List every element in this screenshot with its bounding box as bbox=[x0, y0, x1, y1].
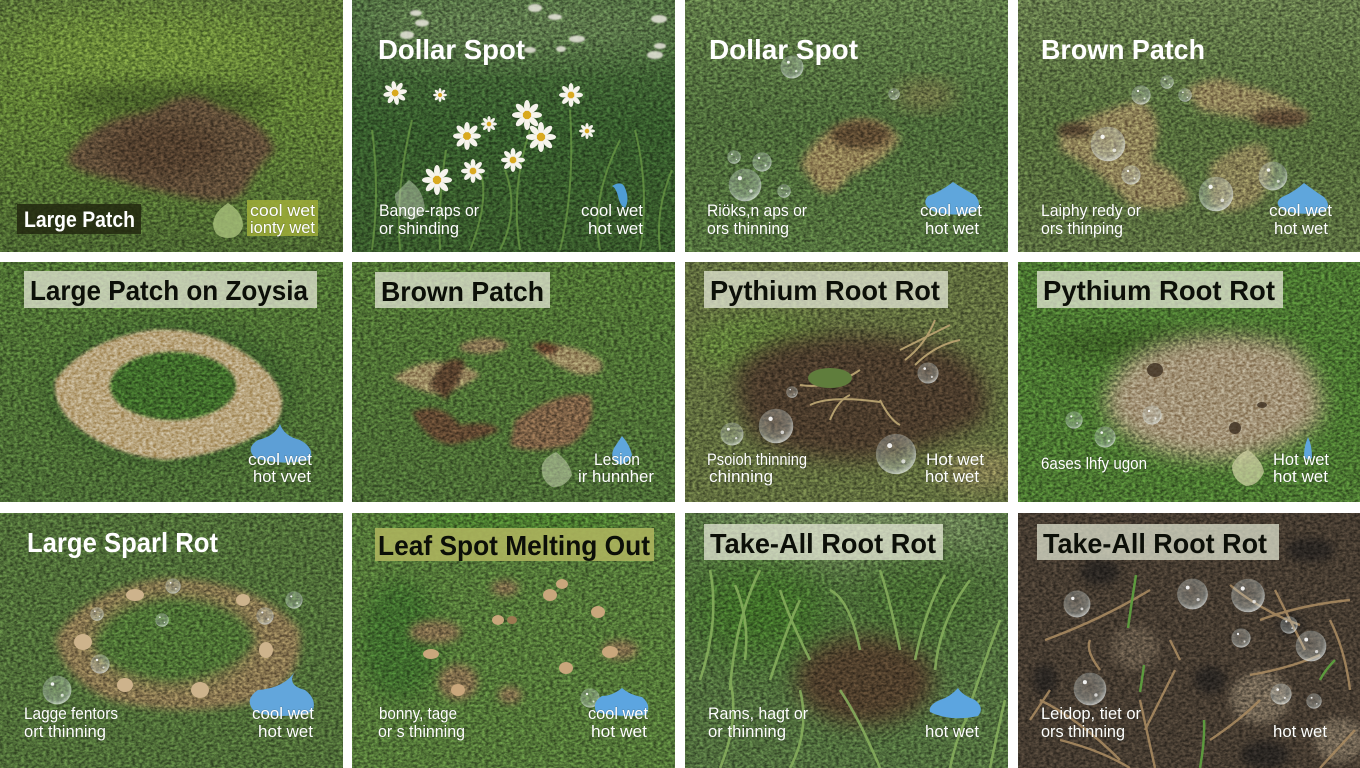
text block: conditions bbox=[920, 201, 982, 238]
panel: Take-All Root Rot grass bbox=[685, 500, 1010, 768]
text block: conditions: hot vvet bbox=[253, 467, 311, 486]
text block: conditions: hot wet bbox=[925, 219, 979, 238]
text block: symptom: ors thinning bbox=[707, 219, 789, 238]
text block: symptom: or s thinning bbox=[378, 722, 465, 741]
icon: water drop bbox=[1304, 437, 1312, 460]
icon: leaf bbox=[1232, 450, 1264, 486]
text block: conditions: cool wet bbox=[1269, 201, 1332, 220]
text block: symptom: ort thinning bbox=[24, 722, 106, 741]
text block: conditions bbox=[581, 201, 643, 238]
text block: symptom: chinning bbox=[709, 467, 773, 486]
icon: water drop bbox=[1278, 183, 1328, 214]
text block: conditions: cool wet bbox=[252, 704, 314, 723]
text block: conditions bbox=[588, 704, 648, 741]
text block: symptom bbox=[24, 704, 118, 741]
text block: symptom bbox=[1041, 704, 1141, 741]
panel: Dollar Spot patches bbox=[685, 0, 1008, 252]
text block: conditions bbox=[925, 450, 984, 486]
text block: conditions bbox=[248, 450, 312, 486]
panel: Brown Patch bubbles bbox=[1018, 0, 1360, 252]
icon: water drop bbox=[925, 182, 979, 214]
text block: conditions: hot wet bbox=[1274, 219, 1328, 238]
text block: symptom: Rams, hagt or bbox=[708, 704, 808, 723]
text block: symptom: or thinning bbox=[708, 722, 786, 741]
callout: conditions bbox=[247, 200, 318, 237]
text block: conditions: hot wet bbox=[588, 219, 643, 238]
text block: conditions: hot wet bbox=[1273, 722, 1327, 741]
text block: conditions: hot wet bbox=[591, 722, 647, 741]
callout: conditions: cool wet bbox=[250, 201, 315, 220]
panel: Take-All Root Rot soil bbox=[1018, 513, 1360, 768]
text block: symptom bbox=[1041, 201, 1141, 238]
text block: symptom: or shinding bbox=[379, 219, 459, 238]
title: Pythium Root Rot bbox=[1043, 275, 1275, 306]
panel: Large Patch on Zoysia bbox=[0, 262, 343, 502]
text block: symptom bbox=[379, 201, 479, 238]
label: Large Patch: Large Patch bbox=[24, 207, 135, 232]
text block: symptom: Riöks,n aps or bbox=[707, 201, 807, 220]
text block: symptom bbox=[707, 450, 807, 486]
panel: Leaf Spot Melting Out bbox=[352, 502, 675, 768]
text block: conditions bbox=[1273, 450, 1329, 486]
panel: Dollar Spot daisies bbox=[350, 0, 690, 252]
text block: symptom: ors thinning bbox=[1041, 722, 1125, 741]
panel: Pythium Root Rot sand bbox=[1018, 262, 1360, 502]
title: Take-All Root Rot bbox=[710, 528, 936, 559]
text block: symptom bbox=[707, 201, 807, 238]
text block: symptom bbox=[378, 704, 465, 741]
icon: water drop bbox=[612, 436, 632, 464]
icon: water drop bbox=[251, 424, 311, 463]
text block: conditions: cool wet bbox=[581, 201, 643, 220]
text block: conditions: Hot wet bbox=[926, 450, 984, 469]
text block: conditions: cool wet bbox=[588, 704, 648, 723]
title: Brown Patch bbox=[381, 276, 544, 307]
panel: Pythium Root Rot soil bbox=[685, 262, 1020, 502]
text block: conditions: hot wet bbox=[925, 467, 979, 486]
panel: Large Spot ring bbox=[0, 513, 343, 768]
icon: water drop bbox=[250, 670, 314, 716]
text block: conditions: hot wet bbox=[1273, 467, 1328, 486]
callout: conditions: ionty wet bbox=[250, 218, 315, 237]
text block: symptom: Leidop, tiet or bbox=[1041, 704, 1141, 723]
panel: Large Patch bbox=[0, 0, 343, 252]
icon: leaf bbox=[213, 203, 243, 238]
icon: water drop bbox=[612, 183, 628, 208]
title: Take-All Root Rot bbox=[1043, 528, 1267, 559]
title: Dollar Spot bbox=[378, 34, 525, 65]
text block: symptom: Laiphy redy or bbox=[1041, 201, 1141, 220]
text block: conditions bbox=[1269, 201, 1332, 238]
title: Leaf Spot Melting Out bbox=[378, 530, 650, 561]
text block: symptom: Psoioh thinning bbox=[707, 450, 807, 469]
icon: water drop bbox=[595, 688, 648, 716]
text block: conditions: Hot wet bbox=[1273, 450, 1329, 469]
icon: leaf bbox=[395, 180, 425, 219]
text block: conditions: cool wet bbox=[920, 201, 982, 220]
text block: conditions: hot wet bbox=[258, 722, 313, 741]
text block: conditions bbox=[578, 450, 654, 486]
text block: symptom: bonny, tage bbox=[379, 704, 457, 723]
text block: symptom: Bange-raps or bbox=[379, 201, 479, 220]
title: Large Sparl Rot bbox=[27, 527, 218, 558]
title: Large Patch on Zoysia bbox=[30, 275, 308, 306]
icon: water drop bbox=[930, 688, 981, 718]
text block: conditions: hot wet bbox=[925, 722, 979, 741]
text block: symptom: ors thinping bbox=[1041, 219, 1123, 238]
text block: conditions: ir hunnher bbox=[578, 467, 654, 486]
text block: conditions: cool wet bbox=[248, 450, 312, 469]
icon: leaf bbox=[542, 452, 572, 487]
text block: conditions: Lesion bbox=[594, 450, 640, 469]
panel: Brown Patch ring bbox=[352, 262, 675, 502]
text block: symptom: 6ases lhfy ugon bbox=[1041, 454, 1147, 473]
title: Brown Patch bbox=[1041, 34, 1205, 65]
title: Pythium Root Rot bbox=[710, 275, 940, 306]
title: Dollar Spot bbox=[709, 34, 858, 65]
text block: symptom: Lagge fentors bbox=[24, 704, 118, 723]
text block: symptom bbox=[708, 704, 808, 741]
text block: conditions bbox=[252, 704, 314, 741]
